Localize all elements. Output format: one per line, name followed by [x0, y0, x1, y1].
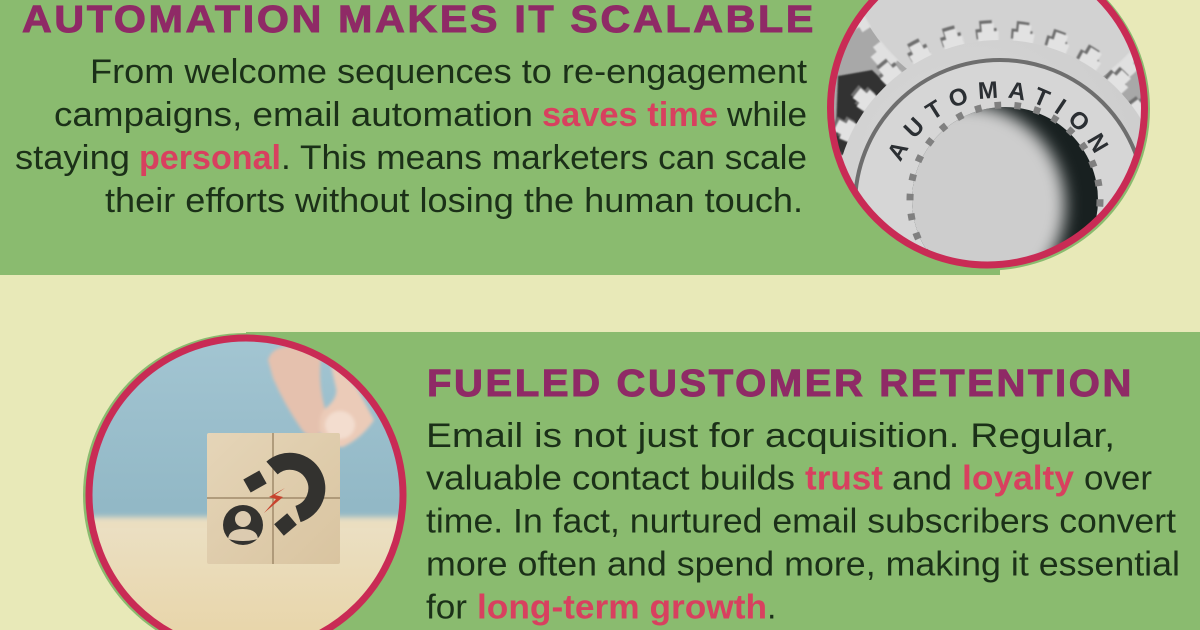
text block: retention description: more often and spend more, making it essential — [426, 546, 1180, 584]
panel: customer retention — [83, 332, 1200, 630]
text block: automation description: their efforts without losing the human touch. — [105, 182, 803, 220]
text block: retention description: over — [1084, 460, 1152, 498]
heading: fueled customer retention: FUELED CUSTOMER RETENTION — [427, 363, 1134, 405]
text block: retention description: loyalty — [962, 460, 1074, 498]
photo: magnet attracting customer on wooden blocks — [85, 335, 410, 630]
text block: automation description: . This means marketers can scale — [281, 139, 807, 177]
text block: retention description: trust — [805, 460, 883, 498]
text block: retention description — [426, 417, 1180, 626]
text block: automation description: while — [726, 96, 807, 134]
photo: automation gears — [827, 0, 1148, 268]
text block: retention description: time. In fact, nurtured email subscribers convert — [426, 502, 1177, 540]
heading: automation makes it scalable: AUTOMATION MAKES IT SCALABLE — [22, 0, 816, 41]
gear engraving: AUTOMATION: AUTOMATION — [889, 81, 1108, 162]
text block: automation description: staying — [15, 139, 130, 177]
text block: automation description: From welcome sequences to re-engagement — [90, 53, 808, 91]
hand — [268, 346, 374, 447]
text block: retention description: for — [426, 588, 467, 626]
panel: automation — [0, 0, 1150, 275]
text block: retention description: valuable contact builds — [426, 460, 795, 498]
text block: retention description: . — [767, 588, 776, 626]
text block: automation description: campaigns, email automation — [54, 96, 533, 134]
text block: automation description — [15, 53, 808, 220]
text block: retention description: and — [892, 460, 952, 498]
text block: retention description: long-term growth — [477, 588, 767, 626]
icon: customer — [223, 505, 263, 545]
text block: retention description: Email is not just for acquisition. Regular, — [426, 417, 1115, 455]
icon: magnet — [247, 461, 317, 530]
text block: automation description: personal — [139, 139, 281, 177]
wooden blocks — [207, 433, 340, 564]
text block: automation description: saves time — [542, 96, 718, 134]
icon: lightning bolt — [264, 488, 285, 513]
